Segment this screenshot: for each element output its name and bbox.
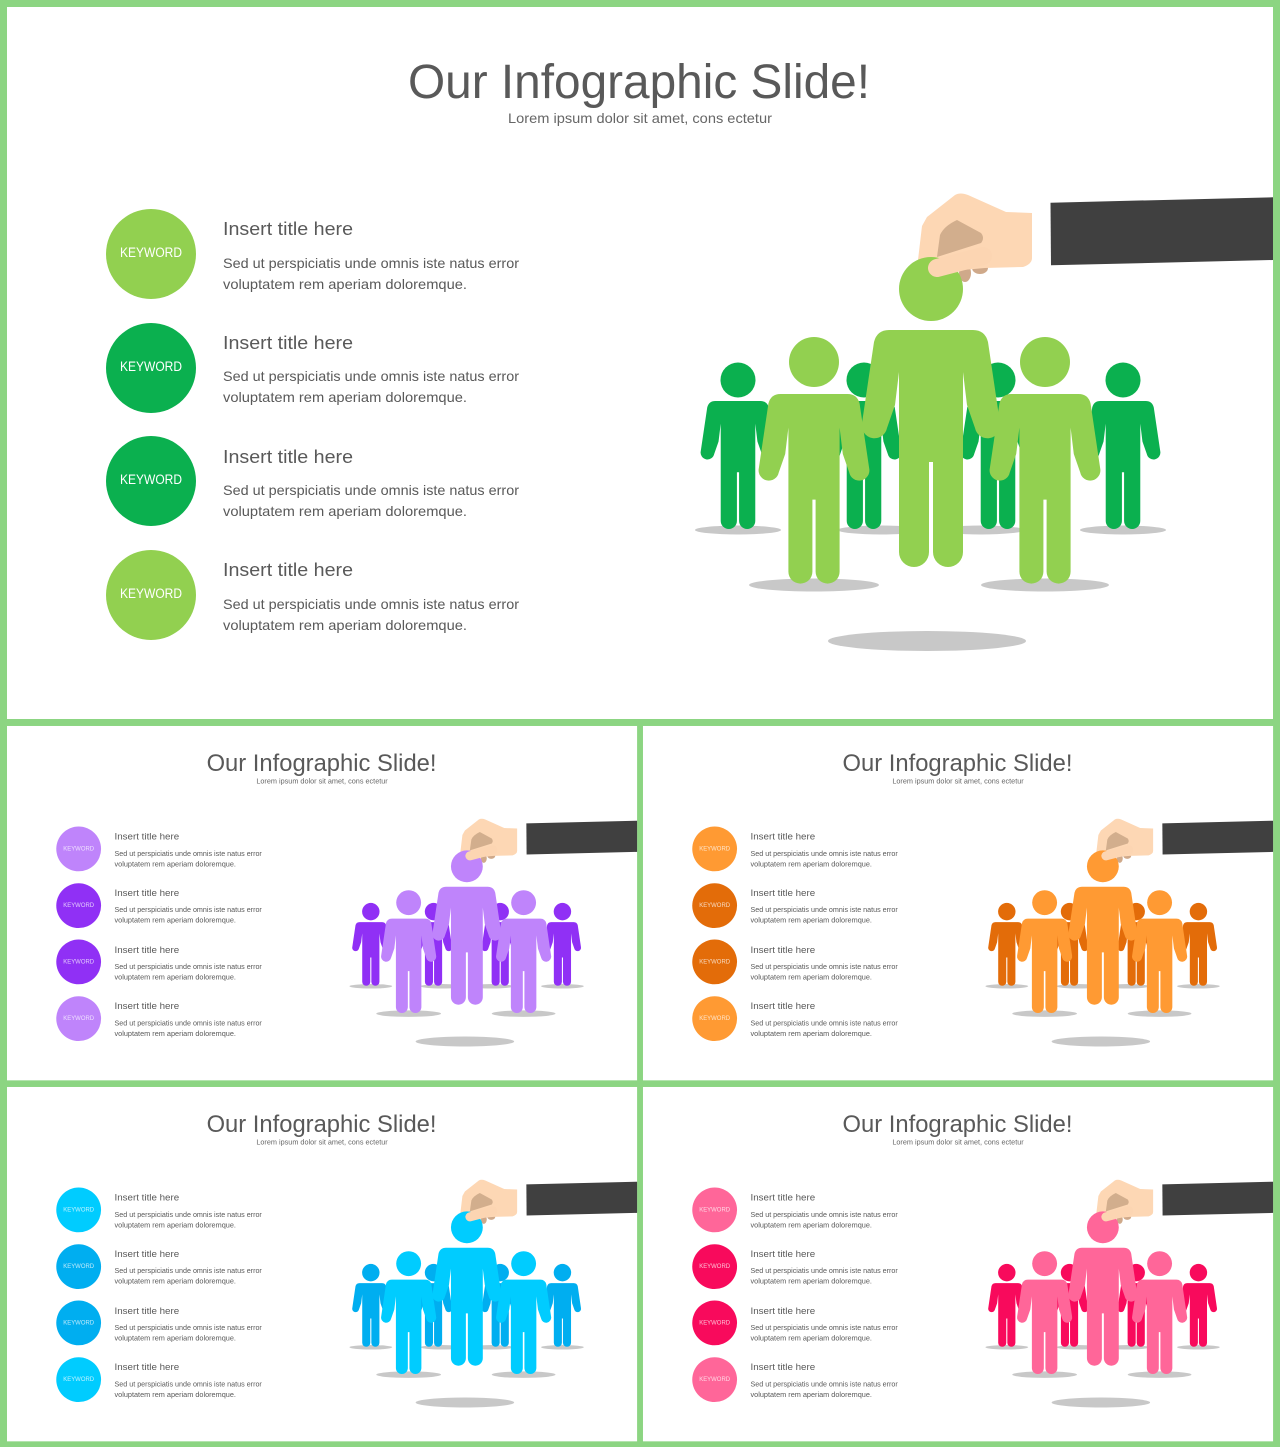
list item 1: voluptatem rem aperiam doloremque. bbox=[115, 861, 236, 868]
subtitle: Lorem ipsum dolor sit amet, cons ectetur bbox=[256, 1140, 388, 1147]
panel: pink slide bbox=[643, 1087, 1273, 1441]
list item 2: voluptatem rem aperiam doloremque. bbox=[750, 918, 872, 925]
list item 1 bbox=[56, 827, 263, 871]
list item 3: KEYWORD bbox=[699, 958, 730, 965]
list item 4 bbox=[56, 996, 263, 1041]
list item 4: Insert title here bbox=[115, 1001, 179, 1011]
list item 4: voluptatem rem aperiam doloremque. bbox=[115, 1392, 236, 1399]
list item 2: Sed ut perspiciatis unde omnis iste natus error bbox=[223, 368, 519, 384]
list item 3 bbox=[692, 1300, 899, 1345]
list item 3: KEYWORD bbox=[120, 472, 182, 487]
list item 1 bbox=[692, 1188, 899, 1232]
list item 2: Sed ut perspiciatis unde omnis iste natus error bbox=[115, 907, 263, 914]
list item 2 bbox=[692, 1244, 899, 1289]
list item 2: Insert title here bbox=[115, 1249, 179, 1259]
list item 4: Insert title here bbox=[223, 560, 353, 580]
list item 3: Sed ut perspiciatis unde omnis iste natus error bbox=[750, 1325, 899, 1332]
subtitle: Lorem ipsum dolor sit amet, cons ectetur bbox=[892, 779, 1024, 786]
list item 1: voluptatem rem aperiam doloremque. bbox=[223, 276, 467, 292]
list item 2 bbox=[56, 1244, 263, 1289]
list item 2: Sed ut perspiciatis unde omnis iste natus error bbox=[750, 907, 899, 914]
list item 3: voluptatem rem aperiam doloremque. bbox=[750, 974, 872, 981]
list item 1: Insert title here bbox=[750, 831, 815, 841]
list item 4: voluptatem rem aperiam doloremque. bbox=[223, 617, 467, 633]
list item 4: voluptatem rem aperiam doloremque. bbox=[750, 1392, 872, 1399]
list item 2: voluptatem rem aperiam doloremque. bbox=[750, 1279, 872, 1286]
list item 4: Sed ut perspiciatis unde omnis iste natus error bbox=[750, 1382, 899, 1389]
list item 2: Insert title here bbox=[750, 1249, 815, 1259]
list item 3: voluptatem rem aperiam doloremque. bbox=[115, 1335, 236, 1342]
list item 3 bbox=[56, 939, 263, 984]
list item 4 bbox=[106, 550, 519, 640]
list item 2: voluptatem rem aperiam doloremque. bbox=[115, 1279, 236, 1286]
list item 1: Sed ut perspiciatis unde omnis iste natus error bbox=[223, 255, 519, 271]
list item 1: KEYWORD bbox=[120, 245, 182, 260]
list item 3: Sed ut perspiciatis unde omnis iste natus error bbox=[750, 964, 899, 971]
list item 1: Sed ut perspiciatis unde omnis iste natus error bbox=[115, 1212, 263, 1219]
list item 4: Insert title here bbox=[750, 1362, 815, 1372]
list item 3: KEYWORD bbox=[63, 958, 94, 965]
list item 4: Sed ut perspiciatis unde omnis iste natus error bbox=[750, 1021, 899, 1028]
list item 3: voluptatem rem aperiam doloremque. bbox=[115, 974, 236, 981]
list item 1: voluptatem rem aperiam doloremque. bbox=[750, 861, 872, 868]
title: Our Infographic Slide! bbox=[843, 1111, 1072, 1138]
list item 4: Sed ut perspiciatis unde omnis iste natus error bbox=[223, 596, 519, 612]
list item 3: KEYWORD bbox=[699, 1319, 730, 1326]
panel: orange slide bbox=[643, 726, 1273, 1080]
list item 2: KEYWORD bbox=[699, 902, 730, 909]
list item 4 bbox=[692, 1357, 899, 1402]
list item 1 bbox=[692, 827, 899, 871]
list item 1: Insert title here bbox=[115, 1192, 179, 1202]
list item 1: Insert title here bbox=[223, 219, 353, 239]
list item 3: Insert title here bbox=[115, 945, 179, 955]
list item 3: Sed ut perspiciatis unde omnis iste natus error bbox=[115, 1325, 263, 1332]
list item 3: Insert title here bbox=[223, 447, 353, 467]
list item 1: voluptatem rem aperiam doloremque. bbox=[750, 1222, 872, 1229]
list item 3: Insert title here bbox=[115, 1306, 179, 1316]
subtitle: Lorem ipsum dolor sit amet, cons ectetur bbox=[508, 110, 772, 126]
list item 2 bbox=[106, 323, 519, 413]
list item 3 bbox=[56, 1300, 263, 1345]
list item 1: Insert title here bbox=[115, 831, 179, 841]
illustration: hand dropping head onto crowd bbox=[695, 194, 1273, 651]
list item 2: KEYWORD bbox=[63, 902, 94, 909]
list item 3: Insert title here bbox=[750, 1306, 815, 1316]
title: Our Infographic Slide! bbox=[207, 750, 437, 777]
list item 3 bbox=[692, 939, 899, 984]
illustration: hand dropping head onto crowd bbox=[349, 1180, 637, 1408]
list item 1: KEYWORD bbox=[699, 845, 730, 852]
list item 1 bbox=[106, 209, 519, 299]
list item 4: Sed ut perspiciatis unde omnis iste natus error bbox=[115, 1021, 263, 1028]
list item 4: KEYWORD bbox=[63, 1376, 94, 1383]
list item 1: KEYWORD bbox=[699, 1206, 730, 1213]
list item 2: voluptatem rem aperiam doloremque. bbox=[223, 389, 467, 405]
list item 4: KEYWORD bbox=[699, 1015, 730, 1022]
list item 3: Insert title here bbox=[750, 945, 815, 955]
subtitle: Lorem ipsum dolor sit amet, cons ectetur bbox=[892, 1140, 1024, 1147]
illustration: hand dropping head onto crowd bbox=[349, 819, 637, 1047]
subtitle: Lorem ipsum dolor sit amet, cons ectetur bbox=[256, 779, 388, 786]
list item 4 bbox=[56, 1357, 263, 1402]
list item 2: Sed ut perspiciatis unde omnis iste natus error bbox=[115, 1268, 263, 1275]
list item 4: Insert title here bbox=[750, 1001, 815, 1011]
list item 1: voluptatem rem aperiam doloremque. bbox=[115, 1222, 236, 1229]
list item 4: Sed ut perspiciatis unde omnis iste natus error bbox=[115, 1382, 263, 1389]
list item 4: KEYWORD bbox=[63, 1015, 94, 1022]
list item 3: Sed ut perspiciatis unde omnis iste natus error bbox=[115, 964, 263, 971]
illustration: hand dropping head onto crowd bbox=[985, 1180, 1273, 1408]
list item 3 bbox=[106, 436, 519, 526]
list item 2 bbox=[56, 883, 263, 928]
title: Our Infographic Slide! bbox=[843, 750, 1072, 777]
list item 4: KEYWORD bbox=[699, 1376, 730, 1383]
list item 1: Sed ut perspiciatis unde omnis iste natus error bbox=[750, 1212, 899, 1219]
title: Our Infographic Slide! bbox=[408, 56, 870, 109]
list item 2: Insert title here bbox=[115, 888, 179, 898]
list item 1 bbox=[56, 1188, 263, 1232]
list item 1: Sed ut perspiciatis unde omnis iste natus error bbox=[115, 851, 263, 858]
list item 1: KEYWORD bbox=[63, 845, 94, 852]
list item 4: voluptatem rem aperiam doloremque. bbox=[115, 1031, 236, 1038]
list item 2: Insert title here bbox=[750, 888, 815, 898]
list item 3: KEYWORD bbox=[63, 1319, 94, 1326]
list item 3: Sed ut perspiciatis unde omnis iste natus error bbox=[223, 482, 519, 498]
panel: main green slide bbox=[7, 7, 1273, 719]
list item 4: voluptatem rem aperiam doloremque. bbox=[750, 1031, 872, 1038]
list item 3: voluptatem rem aperiam doloremque. bbox=[223, 503, 467, 519]
list item 2: KEYWORD bbox=[699, 1263, 730, 1270]
list item 4: KEYWORD bbox=[120, 586, 182, 601]
illustration: hand dropping head onto crowd bbox=[985, 819, 1273, 1047]
list item 1: Sed ut perspiciatis unde omnis iste natus error bbox=[750, 851, 899, 858]
panel: blue slide bbox=[7, 1087, 637, 1441]
list item 2: KEYWORD bbox=[63, 1263, 94, 1270]
list item 4: Insert title here bbox=[115, 1362, 179, 1372]
list item 2 bbox=[692, 883, 899, 928]
list item 3: voluptatem rem aperiam doloremque. bbox=[750, 1335, 872, 1342]
list item 2: KEYWORD bbox=[120, 359, 182, 374]
list item 2: Sed ut perspiciatis unde omnis iste natus error bbox=[750, 1268, 899, 1275]
list item 2: voluptatem rem aperiam doloremque. bbox=[115, 918, 236, 925]
list item 1: KEYWORD bbox=[63, 1206, 94, 1213]
panel: purple slide bbox=[7, 726, 637, 1080]
list item 4 bbox=[692, 996, 899, 1041]
title: Our Infographic Slide! bbox=[207, 1111, 437, 1138]
list item 1: Insert title here bbox=[750, 1192, 815, 1202]
list item 2: Insert title here bbox=[223, 333, 353, 353]
